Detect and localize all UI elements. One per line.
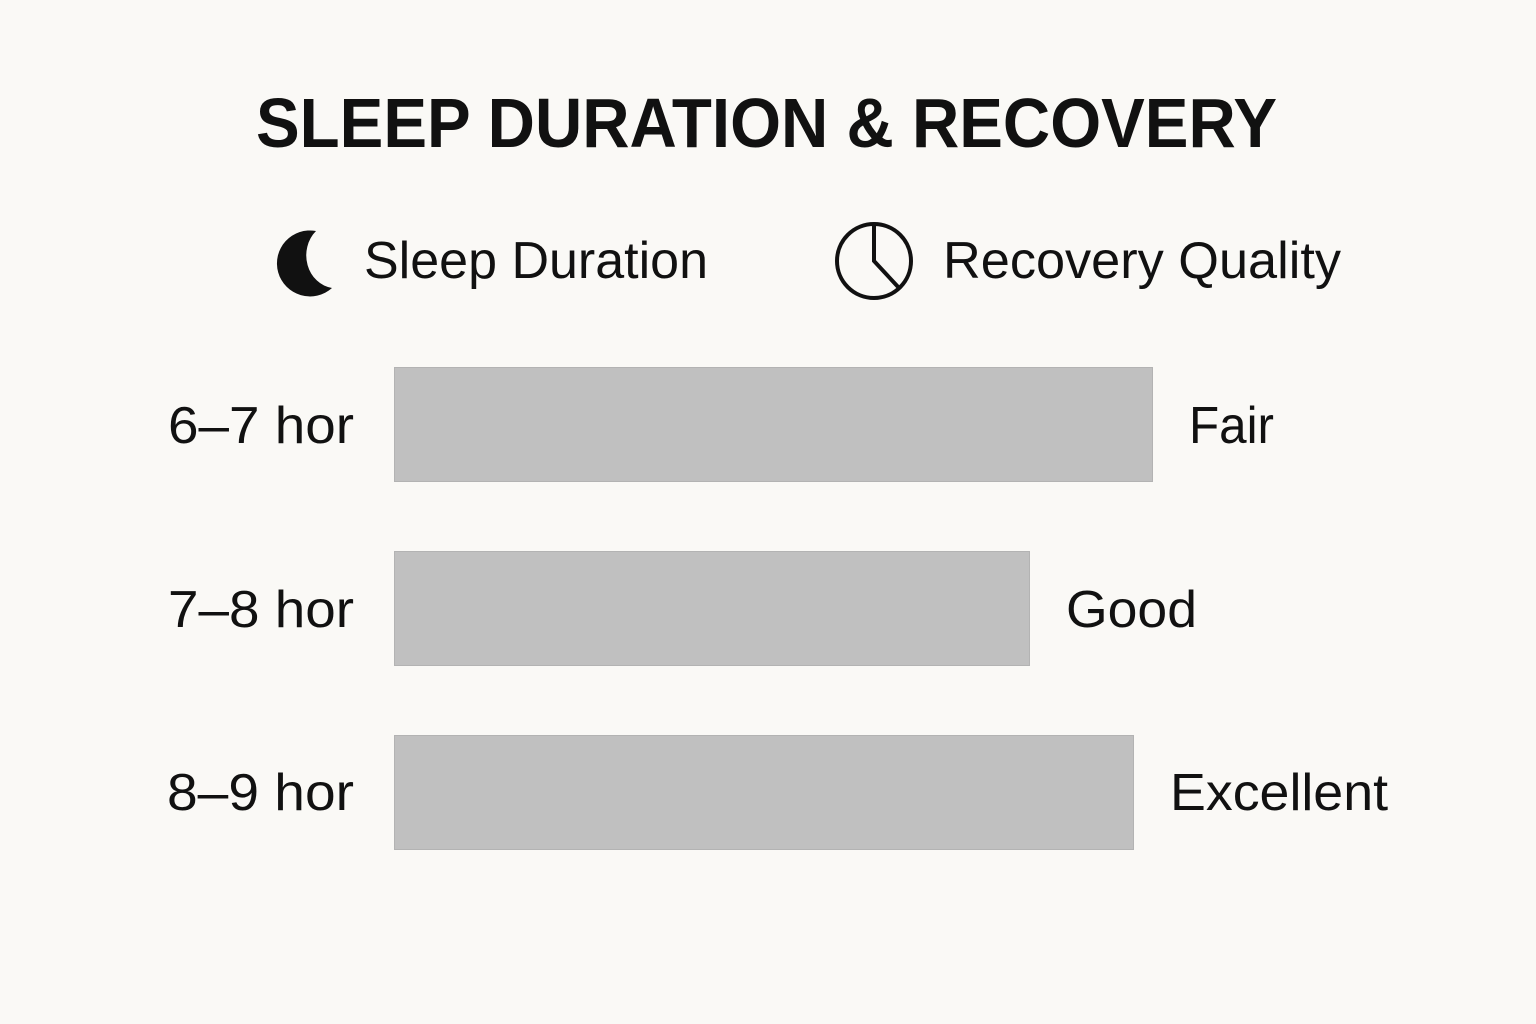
row: 7-8 hor: 7–8 hor: [168, 581, 354, 639]
row: 7-8 hor: Good: [1066, 581, 1197, 639]
row: 8-9 hor: 8–9 hor: [167, 764, 354, 822]
legend: recovery quality: [837, 224, 1341, 298]
title: SLEEP DURATION & RECOVERY: [256, 84, 1277, 162]
row: 7-8 hor: [168, 552, 1197, 666]
row: 8-9 hor: Excellent: [1170, 764, 1389, 822]
row: 8-9 hor: [167, 736, 1389, 850]
row: 6-7 hor: [168, 368, 1274, 482]
row: 6-7 hor: 6–7 hor: [168, 397, 354, 455]
row: 6-7 hor: Fair: [1189, 397, 1274, 455]
legend: recovery quality: Recovery Quality: [943, 232, 1341, 290]
bar chart: [167, 368, 1389, 850]
icon: clock: [837, 224, 911, 298]
icon: moon: [277, 230, 332, 296]
legend: sleep duration: Sleep Duration: [364, 232, 708, 290]
